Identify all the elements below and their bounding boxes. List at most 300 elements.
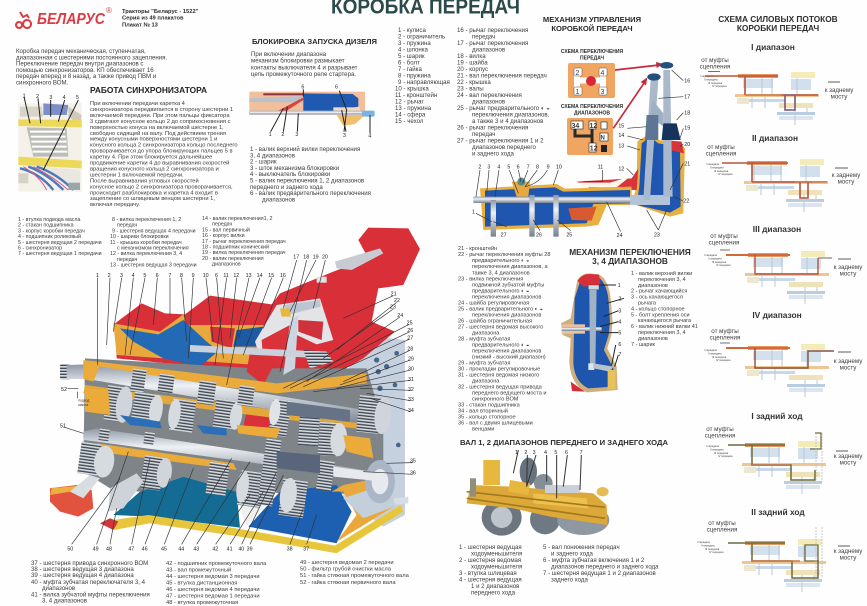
callout numbers: 3 bbox=[120, 273, 123, 279]
shaft legend left: ходоуменьшителя bbox=[471, 564, 522, 570]
callout numbers: 5 bbox=[507, 165, 510, 171]
gear labels: III передача bbox=[705, 547, 720, 551]
input label: от муфты bbox=[711, 328, 739, 335]
gear labels: III передача bbox=[708, 81, 723, 85]
lock legend: переднего и заднего хода bbox=[250, 184, 323, 191]
callout numbers: 7 bbox=[168, 273, 171, 279]
shaft cutaway drawing: 1 bbox=[515, 450, 518, 456]
synchronizer text: включаемой передачи. При этом пальцы фиксатора bbox=[90, 112, 230, 119]
parts list 1-15: 7 - гайка bbox=[398, 66, 422, 73]
parts list 16-27: переключения диапазонов, bbox=[472, 112, 550, 118]
range II heading: II диапазон bbox=[752, 133, 798, 143]
callout numbers: 33 bbox=[408, 397, 414, 403]
list: parts 21-36: 32 - шестерня ведущая привода bbox=[458, 384, 543, 390]
range 3-4 legend: рычага bbox=[638, 300, 657, 306]
callout numbers: 35 bbox=[410, 459, 416, 465]
registered mark: ® bbox=[106, 6, 112, 15]
gear labels: I передача bbox=[700, 75, 713, 78]
list: parts 21-36: переключения диапазонов, а bbox=[472, 264, 548, 270]
shaft legend left: 3 - втулка шлицевая bbox=[459, 570, 517, 577]
leader lines bbox=[63, 260, 413, 544]
range I heading: I диапазон bbox=[751, 42, 795, 52]
parts list 16-27: диапазонов переднего bbox=[472, 144, 536, 151]
callout numbers: 20 bbox=[322, 255, 328, 261]
synchronizer text: поверхностью конуса на включаемой шестерне 1, bbox=[90, 124, 224, 131]
casing holes bbox=[374, 351, 401, 447]
lock legend: диапазонов bbox=[262, 196, 295, 203]
callout numbers: 1 bbox=[472, 210, 475, 216]
range shift pattern: N bbox=[600, 136, 605, 142]
range 3-4 legend: качающегося рычага bbox=[638, 318, 692, 324]
output label: мосту bbox=[838, 178, 855, 186]
shaft legend right: 5 - вал понижения передач bbox=[543, 544, 620, 551]
gearbox legend bottom column 1: 37 - шестерня привода синхронного ВОМ bbox=[31, 560, 148, 567]
callout numbers: 24 bbox=[617, 233, 623, 239]
shaft cutaway drawing: 6 bbox=[565, 450, 568, 456]
blue casing window bbox=[120, 320, 218, 367]
gear shift pattern: 3 bbox=[600, 89, 604, 96]
list: parts 21-36: 36 - вал с двумя шлицевыми bbox=[458, 420, 533, 426]
callout numbers: 43 bbox=[193, 546, 199, 552]
gearbox legend bottom column 2: 48 - втулка промежуточная bbox=[166, 600, 238, 606]
lower-left red foot bbox=[50, 485, 93, 517]
gear chamber underlay bbox=[83, 358, 383, 495]
poster caption: Плакат № 13 bbox=[122, 22, 158, 28]
gearbox legend bottom column 2: 46 - шестерня ведомая 4 передачи bbox=[166, 587, 260, 593]
parts list 16-27: 23 - валы bbox=[457, 86, 484, 92]
gearbox legend bottom column 3: 49 - шестерня ведомая 2 передачи bbox=[300, 560, 394, 566]
splined lower shaft bbox=[277, 452, 320, 473]
gearbox legend bottom column 1: 41 - вилка зубчатой муфты переключения bbox=[31, 591, 150, 598]
list: parts 21-36: 29 - муфта зубчатая bbox=[458, 360, 510, 366]
synchronizer diagram: 5 bbox=[76, 95, 79, 101]
synchronizer diagram: 1 bbox=[23, 93, 26, 99]
heading: control mechanism: КОРОБКОЙ ПЕРЕДАЧ bbox=[551, 24, 633, 33]
lock legend: 3 - шток механизма блокировки bbox=[250, 165, 339, 172]
callout numbers: 37 bbox=[303, 546, 309, 552]
gearbox legend bottom column 2: 45 - втулка дистанционная bbox=[166, 580, 237, 586]
range 3-4 cutaway: 7 bbox=[618, 352, 621, 358]
output label: к заднему bbox=[834, 453, 862, 460]
callout numbers: 6 bbox=[215, 273, 218, 279]
parts list 16-27: диапазонов bbox=[472, 98, 505, 106]
input label: сцепления bbox=[709, 240, 739, 246]
callout numbers: масла bbox=[78, 403, 88, 407]
callout numbers: 52 bbox=[61, 387, 67, 393]
gear labels: I передача bbox=[697, 541, 710, 544]
red inner windows bbox=[262, 325, 291, 368]
callout numbers: 8 bbox=[536, 165, 539, 171]
range 3-4 legend: 2 - рычаг качающийся bbox=[631, 288, 687, 295]
gear labels: IV передача bbox=[718, 172, 733, 176]
callout numbers: 32 bbox=[408, 387, 414, 393]
upper casing strip bbox=[83, 360, 367, 393]
lock diagram: 6 bbox=[301, 85, 304, 91]
list: parts 21-36: 34 - вал вторичный bbox=[458, 408, 508, 414]
red upper casing bbox=[115, 228, 420, 372]
range 3-4 legend: переключения 3, 4 bbox=[638, 330, 686, 336]
heading: power flow scheme: СХЕМА СИЛОВЫХ ПОТОКОВ bbox=[718, 14, 838, 24]
callout numbers: 38 bbox=[287, 546, 293, 552]
callout numbers: 30 bbox=[408, 366, 414, 372]
right casing panel bbox=[343, 335, 405, 527]
gear labels: IV передача bbox=[716, 358, 731, 362]
parts list 1-15: 4 - шпонка bbox=[398, 46, 429, 54]
range 3-4 cutaway: 2 bbox=[618, 296, 621, 302]
gearbox legend bottom column 3: 52 - гайка стяжная первичного вала bbox=[300, 579, 396, 586]
range 3-4 legend: диапазонов bbox=[638, 283, 668, 289]
lock diagram: 3 bbox=[295, 132, 298, 138]
gearbox legend bottom column 2: 47 - шестерня ведомая 1 передачи bbox=[166, 594, 260, 600]
callout numbers: 23 bbox=[654, 232, 660, 238]
callout numbers: 21 bbox=[391, 291, 397, 297]
lock diagram: 4 bbox=[368, 134, 371, 140]
range 3-4 cutaway: 4 bbox=[618, 320, 621, 326]
gearbox legend bottom column 3: 50 - фильтр грубой очистки масла bbox=[300, 566, 392, 573]
upper fork rod bbox=[190, 345, 323, 358]
power flow path bbox=[728, 543, 818, 578]
pale lever bay bbox=[255, 298, 333, 357]
gear labels: II передача bbox=[710, 165, 724, 169]
upper gears bbox=[103, 368, 393, 457]
top casing frame bbox=[113, 314, 267, 365]
gearbox legend column 2: 8 - вилка переключения 1, 2 bbox=[112, 217, 181, 223]
gearbox legend column 3: 17 - рычаг переключения передач bbox=[202, 239, 286, 245]
lower shaft end bbox=[108, 473, 143, 512]
callout numbers: 50 bbox=[67, 546, 73, 552]
shaft legend left: 4 - шестерня ведущая bbox=[459, 576, 522, 584]
gearbox legend column 3: диапазонов bbox=[212, 262, 241, 268]
label: gear shift pattern: ПЕРЕДАЧ bbox=[580, 56, 604, 62]
label: gear shift pattern: СХЕМА ПЕРЕКЛЮЧЕНИЯ bbox=[561, 49, 623, 55]
upper shaft bbox=[67, 364, 383, 425]
callout numbers: 22 bbox=[683, 199, 689, 205]
callout numbers: 12 bbox=[233, 273, 239, 279]
list: parts 21-36: 33 - стакан подшипника bbox=[458, 402, 521, 408]
synchronizer text: происходит разблокировка и каретка 4 входит в bbox=[90, 190, 218, 196]
shaft legend left: 1 и 2 диапазонов bbox=[471, 583, 519, 590]
lock diagram: 6 bbox=[335, 85, 338, 91]
callout numbers: 42 bbox=[212, 546, 218, 552]
parts list 1-15: 13 - пружина bbox=[395, 105, 432, 112]
callout numbers: 29 bbox=[408, 356, 414, 362]
callout numbers: подвод bbox=[78, 399, 89, 403]
callout numbers: 31 bbox=[408, 377, 414, 383]
callout numbers: 36 bbox=[410, 470, 416, 476]
right gear cluster bevel bbox=[303, 350, 333, 368]
callout numbers: 39 bbox=[247, 546, 253, 552]
list: parts 21-36: подвижной зубчатой муфты bbox=[472, 282, 544, 288]
control mechanism cutaway bbox=[472, 62, 690, 239]
gear labels: I передача bbox=[704, 349, 717, 352]
parts list 1-15: 12 - рычаг bbox=[395, 98, 425, 106]
shaft legend left: 1 - шестерня ведущая bbox=[459, 544, 522, 551]
parts list 1-15: 15 - чехол bbox=[395, 118, 424, 125]
callout numbers: 13 bbox=[246, 273, 252, 279]
callout numbers: 19 bbox=[684, 126, 690, 132]
output label: мосту bbox=[840, 554, 857, 562]
callout numbers: 16 bbox=[280, 273, 286, 279]
gearbox legend column 2: 12 - вилка переключения 3, 4 bbox=[110, 251, 182, 257]
gearbox legend column 1: 3 - корпус коробки передач bbox=[18, 228, 85, 234]
lock diagram: 2 bbox=[281, 132, 284, 138]
range 3-4 legend: 3 - ось качающегося bbox=[631, 295, 683, 301]
gear labels: II передача bbox=[710, 447, 724, 451]
gear labels: II передача bbox=[708, 351, 722, 355]
parts list 16-27: 21 - вал переключения передач bbox=[457, 72, 547, 80]
callout numbers: 15 bbox=[618, 123, 624, 129]
left casing block bbox=[85, 388, 110, 415]
bottom yellow rim bbox=[113, 505, 403, 553]
callout numbers: 6 bbox=[517, 165, 520, 171]
input label: сцепления bbox=[700, 64, 730, 70]
gearbox legend bottom column 2: 43 - вал промежуточный bbox=[166, 566, 231, 574]
parts list 1-15: 10 - крышка bbox=[395, 86, 429, 92]
gearbox legend column 1: 7 - шестерня ведущая 1 передачи bbox=[18, 251, 102, 257]
parts list 1-15: 14 - сфера bbox=[395, 112, 426, 118]
gear labels: III передача bbox=[712, 355, 727, 359]
intro text: диапазонная с шестернями постоянного зацепления. bbox=[16, 54, 167, 61]
blue lower casing bbox=[248, 485, 352, 543]
list: parts 21-36: 28 - муфта зубчатая bbox=[458, 336, 510, 342]
gearbox legend bottom column 1: 39 - шестерня ведущая 4 диапазона bbox=[31, 572, 134, 579]
range 3-4 legend: 1 - валик верхний вилки bbox=[631, 271, 692, 277]
heading: range 3-4 mechanism: 3, 4 ДИАПАЗОНОВ bbox=[592, 256, 668, 266]
label: range shift pattern: ДИАПАЗОНОВ bbox=[574, 110, 610, 116]
synchronizer text: зацепление со шлицевым венцом шестерни 1, bbox=[90, 196, 215, 202]
poster caption: Тракторы "Беларус - 1522" bbox=[122, 9, 198, 15]
lever arm 21 bbox=[335, 248, 383, 270]
parts list 1-15: 8 - пружина bbox=[398, 72, 431, 80]
lower shaft bbox=[83, 428, 383, 482]
callout numbers: 16 bbox=[684, 79, 690, 85]
gearbox legend column 3: передач bbox=[212, 222, 233, 228]
gear labels: II передача bbox=[708, 256, 722, 260]
range 3-4 cutaway: 5 bbox=[618, 331, 621, 337]
heading: synchronizer: РАБОТА СИНХРОНИЗАТОРА bbox=[90, 86, 207, 95]
output label: к заднему bbox=[834, 358, 862, 365]
list: parts 21-36: предварительного ◐ ◒ bbox=[472, 288, 529, 294]
callout numbers: 41 bbox=[227, 546, 233, 552]
logo: Belarus bbox=[16, 6, 112, 28]
gearbox legend column 2: передач bbox=[117, 223, 138, 229]
input shaft spline bbox=[60, 364, 70, 380]
gearbox legend column 2: 13 - шестерня ведущая 3 передачи bbox=[110, 263, 197, 269]
callout numbers: 4 bbox=[132, 273, 135, 279]
intro text: Переключение передач внутри диапазонов с bbox=[16, 61, 143, 68]
panel: range III bbox=[704, 224, 863, 304]
synchronizer diagram: 2 bbox=[36, 94, 39, 100]
list: parts 21-36: переднего ведущего моста и bbox=[472, 390, 547, 396]
range shift pattern: 12 bbox=[590, 146, 598, 152]
callout numbers: 7 bbox=[527, 165, 530, 171]
callout numbers: 18 bbox=[684, 111, 690, 117]
callout numbers: 25 bbox=[566, 232, 572, 238]
lower casing rear gear bbox=[365, 460, 395, 503]
output label: мосту bbox=[840, 270, 857, 278]
list: parts 21-36: 23 - вилка переключения bbox=[458, 276, 523, 282]
lock diagram bbox=[249, 85, 375, 140]
gearbox legend column 2: 9 - шестерня ведущая 4 передачи bbox=[112, 228, 196, 234]
main gearbox cutaway bbox=[50, 228, 420, 553]
list: parts 21-36: диапазона bbox=[472, 330, 500, 336]
intro text: синхронного ВОМ. bbox=[16, 80, 69, 86]
callout numbers: 24 bbox=[397, 313, 403, 319]
gearbox legend bottom column 1: диапазонов bbox=[42, 585, 75, 592]
callout numbers: 23 bbox=[390, 305, 396, 311]
callout numbers: 20 bbox=[684, 142, 690, 148]
parts list 16-27: передач bbox=[472, 131, 495, 138]
intro text: передач вперед и 8 назад, а также привод ПВМ и bbox=[16, 73, 156, 80]
output label: мосту bbox=[840, 460, 857, 466]
shaft legend left: ходоуменьшителя bbox=[471, 550, 522, 558]
gearbox legend column 3: 14 - валик переключения1, 2 bbox=[202, 216, 272, 222]
range 3-4 cutaway: 1 bbox=[618, 283, 621, 289]
callout numbers: 9 bbox=[547, 165, 550, 171]
parts list 1-15: 9 - направляющая bbox=[398, 79, 450, 86]
gearbox legend bottom column 1: 3, 4 диапазонов bbox=[42, 597, 87, 604]
blue pockets bbox=[120, 415, 162, 428]
parts list 16-27: передач bbox=[472, 34, 495, 40]
output label: к заднему bbox=[834, 548, 862, 555]
gearbox legend column 3: 18 - подшипник конический bbox=[202, 244, 269, 250]
gearbox legend column 3: 19 - вилка переключения передач bbox=[202, 250, 286, 256]
gear shift pattern: 1 bbox=[576, 89, 580, 96]
synchronizer text: конусного кольца 2 синхронизатора кольцо последнего bbox=[90, 143, 238, 149]
synchronizer text: шестерни 1 включаемой передачи. bbox=[90, 171, 184, 178]
gearbox legend column 1: 5 - шестерня ведущая 2 передачи bbox=[18, 240, 102, 246]
range 3-4 cutaway: 3 bbox=[618, 309, 621, 315]
list: parts 21-36: переключения диапазонов bbox=[472, 312, 541, 318]
teal lower casing bbox=[113, 477, 240, 528]
synchronizer diagram: 3 bbox=[49, 95, 52, 101]
panel: reverse II bbox=[697, 507, 863, 592]
parts list 16-27: диапазонов bbox=[472, 46, 505, 54]
shaft cutaway drawing: 4 bbox=[544, 450, 547, 456]
list: parts 21-36: 31 - шестерня ведомая низкого bbox=[458, 372, 539, 378]
shaft legend right: заднего хода bbox=[551, 576, 588, 584]
callout numbers: 26 bbox=[536, 232, 542, 238]
range shift pattern: 34 bbox=[572, 123, 579, 130]
callout numbers bbox=[472, 79, 690, 239]
parts list 16-27: 25 - рычаг предварительного ◐ ◒ bbox=[457, 105, 550, 112]
icon: tractor mark bbox=[16, 12, 31, 28]
callout numbers: 1 bbox=[96, 273, 99, 279]
shaft cutaway drawing bbox=[467, 450, 609, 536]
input label: сцепления bbox=[707, 526, 737, 534]
synchronizer text: продвижение каретки 4 до выравнивания скоростей bbox=[90, 160, 229, 166]
gearbox legend column 3: 15 - вал первичный bbox=[202, 226, 250, 233]
lock legend: 6 - валик предварительного переключения bbox=[250, 190, 371, 197]
callout numbers: 9 bbox=[192, 273, 195, 279]
list: parts 21-36: предварительного ◐ ◒ bbox=[472, 258, 529, 264]
callout numbers: 28 bbox=[407, 346, 413, 352]
list: parts 21-36: 35 - кольцо стопорное bbox=[458, 414, 516, 420]
callout numbers: 14 bbox=[257, 273, 263, 279]
range shift pattern bbox=[567, 118, 613, 155]
lock legend: 1 - валик верхний вилки переключения bbox=[250, 146, 360, 153]
gear labels: III передача bbox=[714, 451, 729, 455]
power flow path bbox=[722, 163, 812, 198]
synchronizer text: При включении передачи каретка 4 bbox=[90, 101, 185, 107]
range 3-4 legend: 7 - шарик bbox=[631, 342, 656, 348]
synchronizer text: проворачивается до упора блокирующих пальцев 5 в bbox=[90, 149, 233, 155]
parts list 16-27: 24 - вал переключения bbox=[457, 92, 522, 99]
gearbox legend column 2: 11 - крышка коробки передач bbox=[110, 240, 182, 246]
lock legend: 5 - валик переключения 1, 2 диапазонов bbox=[250, 178, 364, 184]
synchronizer text: каретку 4. При этом блокируется дальнейшее bbox=[90, 154, 212, 161]
callout numbers: 5 bbox=[143, 273, 146, 279]
callout numbers: 34 bbox=[408, 408, 414, 414]
gear labels: IV передача bbox=[709, 550, 724, 554]
parts list 16-27: 19 - шайба bbox=[457, 60, 488, 66]
parts list 16-27: 20 - корпус bbox=[457, 66, 488, 73]
gearbox legend bottom column 3: 51 - гайка стяжная промежуточного вала bbox=[300, 572, 410, 579]
lock legend: 3, 4 диапазонов bbox=[250, 152, 295, 159]
synchronizer text: конусное кольцо 2 синхронизатора проворачивается, bbox=[90, 184, 233, 190]
gear labels: III передача bbox=[712, 260, 727, 264]
lock legend: 2 - шарик bbox=[250, 159, 277, 166]
shaft legend right: диапазонов переднего и заднего хода bbox=[551, 564, 659, 570]
synchronizer text: между конусными поверхностями шестерни 1 и bbox=[90, 137, 217, 143]
panel: range I bbox=[700, 42, 854, 125]
gear labels: I передача bbox=[704, 254, 717, 257]
list: parts 21-36: венцами bbox=[472, 426, 494, 432]
range shift pattern: 12 bbox=[590, 123, 597, 130]
gear labels: I передача bbox=[706, 445, 719, 448]
list: parts 21-36: (низкий - высокий диапазон) bbox=[472, 354, 546, 360]
range 3-4 legend: 4 - кольцо стопорное bbox=[631, 306, 685, 312]
red arrows bbox=[613, 65, 659, 128]
poster caption: Серия из 49 плакатов bbox=[122, 16, 184, 22]
callout numbers: 46 bbox=[142, 546, 148, 552]
lock legend: 4 - выключатель блокировки bbox=[250, 171, 330, 178]
input label: от муфты bbox=[706, 426, 734, 433]
gear labels: II передача bbox=[701, 543, 715, 547]
shaft legend right: 6 - муфта зубчатая включения 1 и 2 bbox=[543, 557, 645, 564]
callout numbers: 14 bbox=[618, 133, 624, 139]
parts list 1-15: 3 - пружина bbox=[398, 40, 431, 47]
range 3-4 cutaway: 6 bbox=[618, 342, 621, 348]
input label: от муфты bbox=[707, 144, 735, 151]
gear labels: II передача bbox=[704, 77, 718, 81]
callout numbers: 17 bbox=[684, 95, 690, 101]
synchronizer text: вращения конусного кольца 2 синхронизатора и bbox=[90, 166, 219, 172]
callout numbers: 3 bbox=[487, 165, 490, 171]
panel: range IV bbox=[704, 310, 863, 397]
label: range shift pattern: СХЕМА ПЕРЕКЛЮЧЕНИЯ bbox=[561, 104, 623, 110]
callout numbers: 17 bbox=[293, 255, 299, 261]
input label: от муфты bbox=[708, 520, 736, 527]
callout numbers: 27 bbox=[407, 336, 413, 342]
output label: мосту bbox=[840, 364, 857, 372]
parts list 1-15: 1 - кулиса bbox=[398, 27, 426, 34]
shaft legend right: 7 - шестерня ведущая 1 и 2 диапазонов bbox=[543, 570, 656, 577]
gearbox legend column 2: с механизмом переключения bbox=[117, 246, 189, 252]
gear labels: IV передача bbox=[716, 263, 731, 267]
range 3-4 legend: диапазонов bbox=[638, 336, 668, 342]
callout numbers: 10 bbox=[203, 273, 209, 279]
list: parts 21-36: синхронного ВОМ bbox=[472, 396, 519, 402]
brand name: БЕЛАРУС bbox=[37, 11, 106, 28]
heading: diesel start lock: БЛОКИРОВКА ЗАПУСКА ДИЗЕЛЯ bbox=[252, 37, 377, 46]
heading: range 3-4 mechanism: МЕХАНИЗМ ПЕРЕКЛЮЧЕНИЯ bbox=[569, 247, 691, 257]
heading: power flow scheme: КОРОБКИ ПЕРЕДАЧ bbox=[737, 23, 819, 33]
callout numbers bbox=[60, 255, 416, 552]
gear shift pattern: 2 bbox=[576, 70, 580, 77]
parts list 16-27: 17 - рычаг переключения bbox=[457, 40, 528, 47]
shaft cutaway drawing: 2 bbox=[524, 450, 527, 456]
